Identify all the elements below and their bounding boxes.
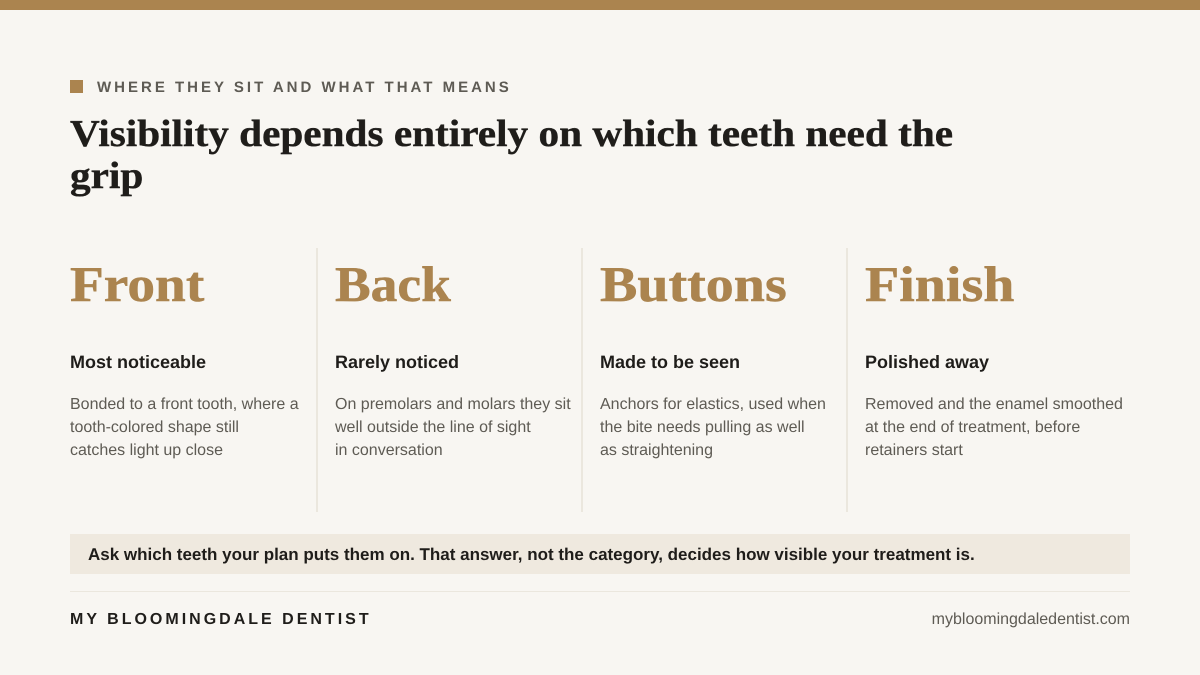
panel: Finish bbox=[865, 256, 1123, 458]
text: Front description bbox=[70, 396, 299, 458]
subheading: Made to be seen: Made to be seen bbox=[600, 352, 740, 372]
footer rule bbox=[70, 591, 1130, 592]
eyebrow text: WHERE THEY SIT AND WHAT THAT MEANS bbox=[97, 79, 512, 96]
top accent bar bbox=[0, 0, 1200, 10]
subheading: Rarely noticed: Rarely noticed bbox=[335, 352, 459, 372]
text: Finish description: Removed and the enamel smoothed bbox=[865, 396, 1123, 412]
text: Finish description: at the end of treatment, before bbox=[865, 418, 1080, 436]
subheading: Most noticeable: Most noticeable bbox=[70, 352, 206, 372]
text: Buttons description: the bite needs pulling as well bbox=[600, 418, 805, 436]
text: Buttons description: as straightening bbox=[600, 442, 713, 458]
text: Front description: Bonded to a front tooth, where a bbox=[70, 396, 299, 412]
callout: Ask which teeth your plan puts them on. That answer, not the category, decides how visible your treatment is. bbox=[88, 545, 975, 564]
panel: Front bbox=[70, 256, 299, 458]
text: Finish description: retainers start bbox=[865, 442, 963, 458]
heading: Front: Front bbox=[70, 256, 204, 312]
callout bbox=[70, 534, 1130, 574]
title: grip bbox=[70, 155, 143, 197]
text: Back description: well outside the line of sight bbox=[335, 418, 531, 436]
text: Back description bbox=[335, 396, 571, 458]
heading: Finish: Finish bbox=[865, 256, 1014, 312]
text: Finish description bbox=[865, 396, 1123, 458]
text: Buttons description bbox=[600, 396, 826, 458]
title: Visibility depends entirely on which teeth need the bbox=[70, 113, 953, 155]
title bbox=[70, 113, 953, 197]
heading: Back: Back bbox=[335, 256, 451, 312]
text: Back description: On premolars and molars they sit bbox=[335, 396, 571, 412]
text: Front description: catches light up close bbox=[70, 442, 223, 458]
text: Back description: in conversation bbox=[335, 442, 443, 458]
panel: Buttons bbox=[600, 256, 826, 458]
divider: column 2-3 bbox=[581, 248, 583, 512]
heading: Buttons: Buttons bbox=[600, 256, 787, 312]
text: Buttons description: Anchors for elastics, used when bbox=[600, 396, 826, 412]
eyebrow heading bbox=[70, 79, 512, 96]
divider: column 3-4 bbox=[846, 248, 848, 512]
footer url: mybloomingdaledentist.com bbox=[932, 611, 1130, 628]
panel: Back bbox=[335, 256, 571, 458]
icon: accent square bbox=[70, 80, 83, 93]
subheading: Polished away: Polished away bbox=[865, 352, 989, 372]
divider: column 1-2 bbox=[316, 248, 318, 512]
text: Front description: tooth-colored shape still bbox=[70, 418, 239, 436]
footer brand: MY BLOOMINGDALE DENTIST bbox=[70, 611, 372, 628]
